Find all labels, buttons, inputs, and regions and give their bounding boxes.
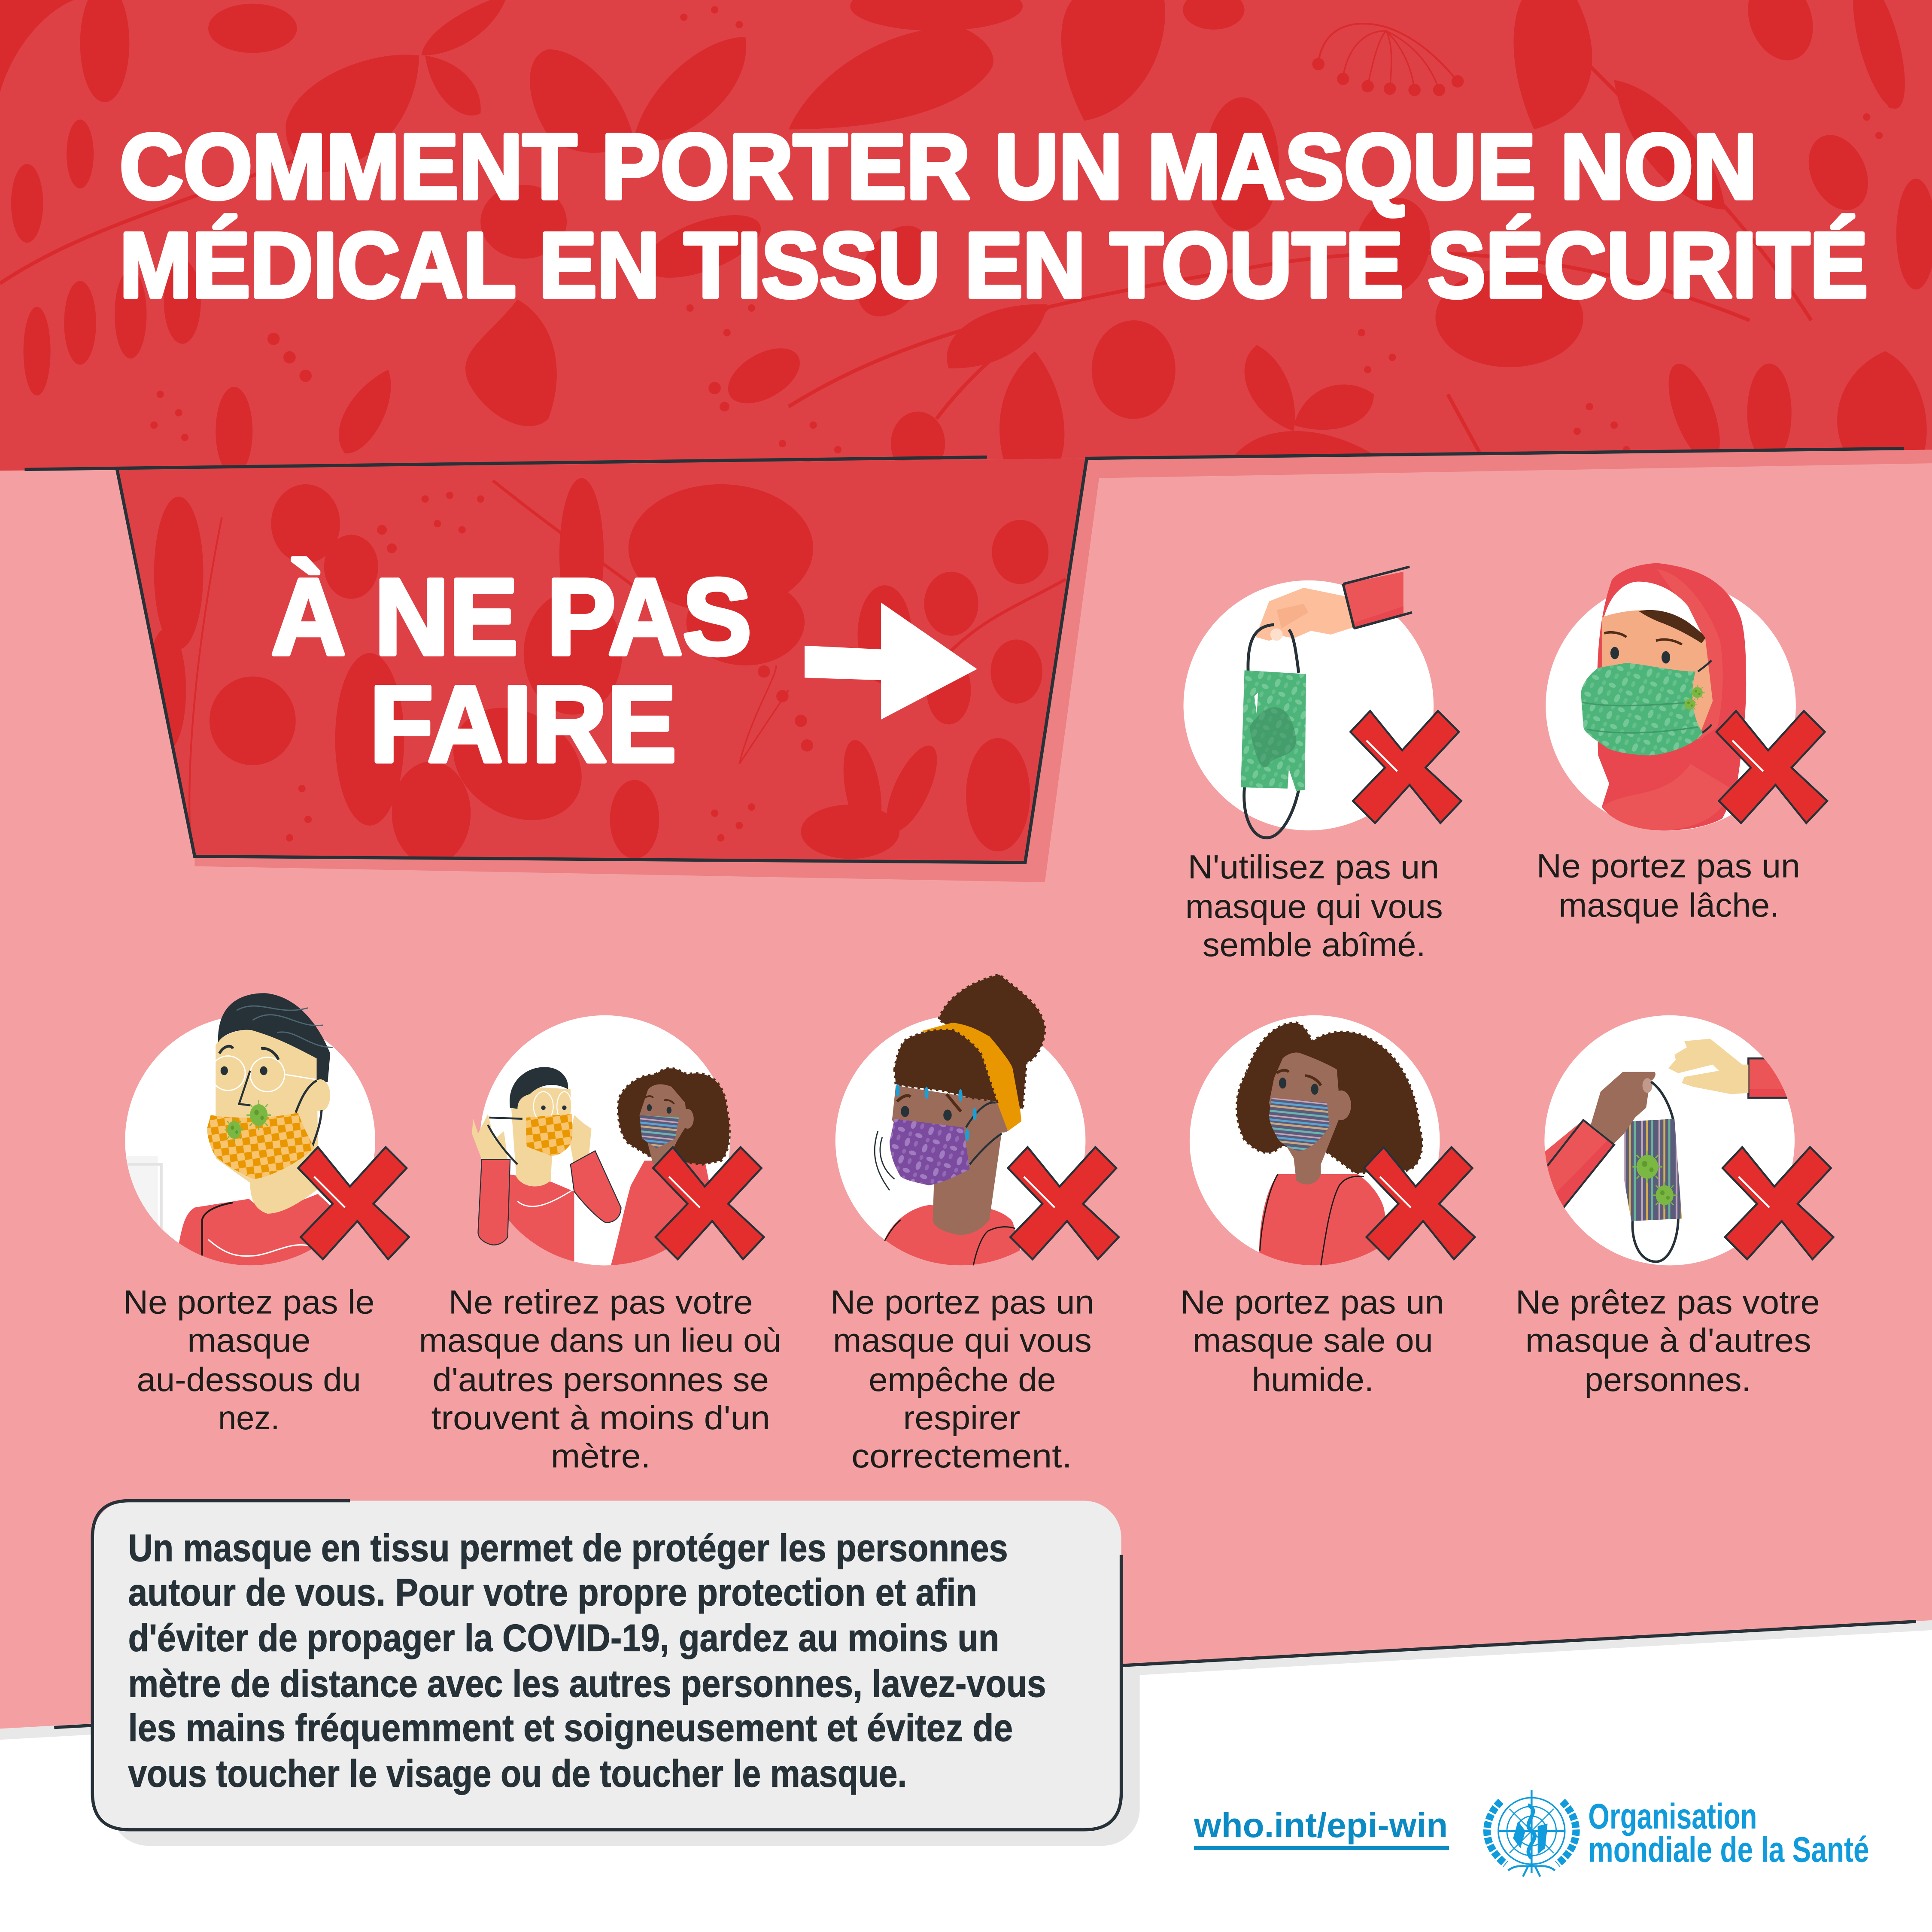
callout text: autour de vous. Pour votre propre protection et afin bbox=[128, 1571, 977, 1613]
caption: semble abîmé. bbox=[1203, 927, 1425, 963]
item: mask below nose bbox=[111, 993, 409, 1437]
caption: humide. bbox=[1252, 1361, 1374, 1398]
top header band with leaf pattern bbox=[0, 0, 1932, 476]
caption bbox=[123, 1284, 374, 1437]
caption bbox=[1185, 849, 1443, 963]
icon: woman with dirty mask bbox=[1237, 1023, 1422, 1282]
heading: à ne pas faire bbox=[271, 556, 752, 785]
item: sharing mask bbox=[1516, 1015, 1833, 1398]
callout text: vous toucher le visage ou de toucher le masque. bbox=[128, 1752, 907, 1795]
callout text: mètre de distance avec les autres personnes, lavez-vous bbox=[128, 1662, 1046, 1705]
caption bbox=[1516, 1284, 1820, 1398]
callout text: d'éviter de propager la COVID-19, gardez au moins un bbox=[128, 1616, 999, 1659]
caption bbox=[1180, 1284, 1444, 1398]
emblem bbox=[1487, 1790, 1576, 1877]
icon: man removing mask bbox=[472, 1067, 621, 1275]
caption: Ne prêtez pas votre bbox=[1516, 1284, 1820, 1321]
caption: Ne portez pas un bbox=[830, 1284, 1094, 1321]
icon: woman with hijab and loose mask bbox=[1581, 563, 1746, 830]
icon: red cross bbox=[1364, 1147, 1475, 1259]
icon: man wearing mask below nose bbox=[126, 993, 333, 1266]
caption: masque à d'autres bbox=[1525, 1322, 1811, 1359]
caption: respirer bbox=[903, 1400, 1020, 1437]
callout: protection message bbox=[92, 1501, 1121, 1830]
callout text: les mains fréquemment et soigneusement et évitez de bbox=[128, 1706, 1013, 1749]
caption: Ne portez pas un bbox=[1537, 848, 1800, 884]
WHO logo bbox=[1487, 1790, 1869, 1877]
icon: sweating woman with tight mask bbox=[863, 975, 1045, 1282]
website link: who.int/epi-win bbox=[1194, 1806, 1448, 1845]
caption: masque lâche. bbox=[1558, 887, 1779, 924]
caption: masque qui vous bbox=[833, 1322, 1092, 1359]
caption: mètre. bbox=[551, 1438, 650, 1475]
icon: red cross bbox=[653, 1147, 764, 1259]
caption: Ne portez pas un bbox=[1180, 1284, 1444, 1321]
caption: masque sale ou bbox=[1193, 1322, 1433, 1359]
caption: correctement. bbox=[851, 1438, 1072, 1475]
icon: red cross bbox=[1350, 711, 1461, 823]
caption: masque qui vous bbox=[1185, 888, 1443, 925]
callout text: Un masque en tissu permet de protéger les personnes bbox=[128, 1526, 1008, 1569]
footer divider lines bbox=[54, 1622, 1916, 1728]
caption: d'autres personnes se bbox=[432, 1361, 769, 1398]
caption: Ne retirez pas votre bbox=[449, 1284, 753, 1321]
caption: nez. bbox=[218, 1400, 279, 1437]
organisation name bbox=[1588, 1796, 1869, 1869]
icon: woman nearby bbox=[610, 1068, 729, 1269]
caption: Ne portez pas le bbox=[123, 1284, 374, 1321]
heading: à ne pas faire: FAIRE bbox=[370, 663, 677, 785]
caption bbox=[1537, 848, 1800, 924]
item: mask restricting breathing bbox=[830, 975, 1119, 1475]
caption: masque bbox=[187, 1322, 310, 1359]
caption bbox=[830, 1284, 1094, 1475]
item: loose mask bbox=[1537, 563, 1827, 924]
caption bbox=[419, 1284, 781, 1475]
caption: masque dans un lieu où bbox=[419, 1322, 781, 1359]
panel shadow bbox=[1087, 450, 1932, 478]
item: removing mask near people bbox=[419, 1015, 781, 1475]
caption: empêche de bbox=[869, 1361, 1056, 1398]
caption: N'utilisez pas un bbox=[1188, 849, 1439, 886]
pink background panel bbox=[0, 444, 1932, 1728]
title: MÉDICAL EN TISSU EN TOUTE SÉCURITÉ bbox=[119, 213, 1868, 317]
arrow bbox=[805, 602, 977, 720]
icon: red cross bbox=[1716, 711, 1827, 823]
heading: à ne pas faire: À NE PAS bbox=[271, 556, 752, 677]
item: damaged mask bbox=[1184, 567, 1461, 963]
panel: à ne pas faire bbox=[24, 449, 1904, 882]
white footer band shadow bbox=[0, 1552, 1932, 1846]
icon: torn mask bbox=[1241, 625, 1306, 838]
icon: hands exchanging mask bbox=[1528, 1039, 1811, 1262]
icon: hand holding mask bbox=[1255, 567, 1412, 641]
caption: trouvent à moins d'un bbox=[431, 1400, 770, 1437]
item: dirty or wet mask bbox=[1180, 1015, 1475, 1398]
icon: red cross bbox=[1722, 1147, 1833, 1259]
caption: personnes. bbox=[1585, 1361, 1751, 1398]
icon: red cross bbox=[298, 1147, 409, 1259]
caption: au-dessous du bbox=[137, 1361, 361, 1398]
icon: red cross bbox=[1008, 1147, 1119, 1259]
callout text bbox=[128, 1526, 1046, 1795]
organisation name: Organisation bbox=[1588, 1796, 1757, 1836]
title bbox=[119, 115, 1868, 317]
title: COMMENT PORTER UN MASQUE NON bbox=[119, 115, 1757, 218]
